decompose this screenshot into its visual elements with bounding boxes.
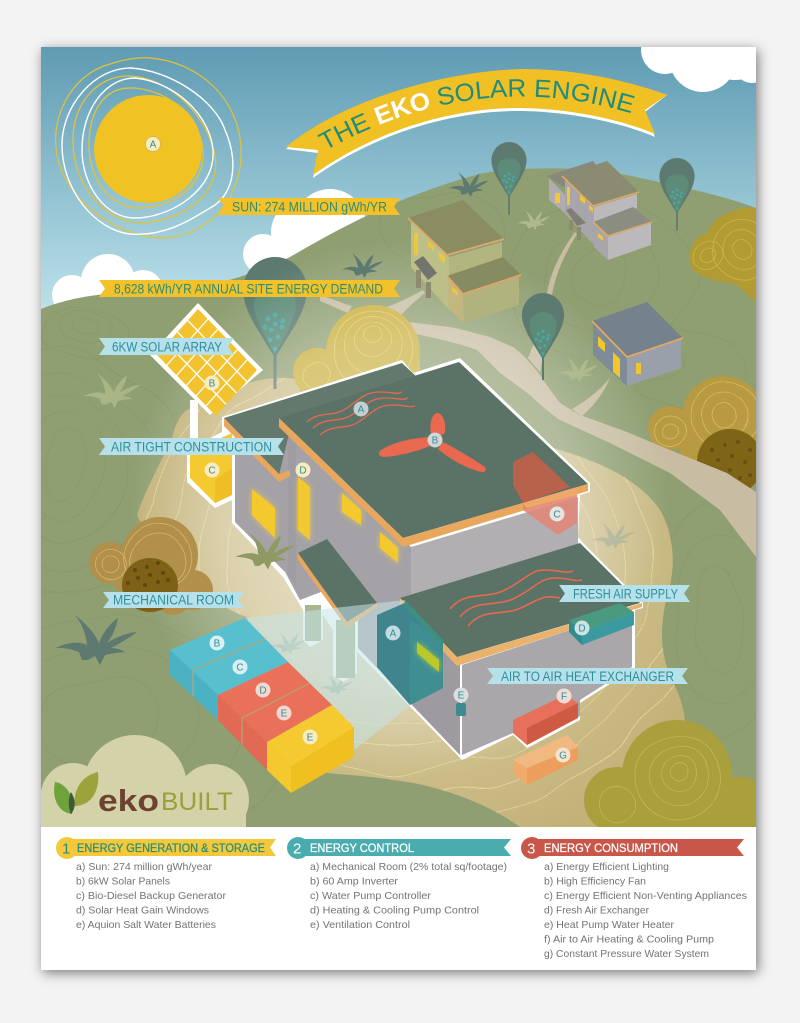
marker badges [146,136,590,762]
list 3: e) Heat Pump Water Heater [544,919,674,931]
banner: fresh air supply: FRESH AIR SUPPLY [573,586,678,602]
badge: block E yellow [302,730,318,744]
banner: mechanical room: MECHANICAL ROOM [113,592,234,608]
illustrated scene [41,47,756,827]
contour lines on hills [41,192,756,811]
legend: energy generation and storage [56,837,276,931]
hills [41,168,756,827]
badge: generator C [204,462,220,478]
list 2 [310,861,507,931]
heat waves lower roof [450,570,582,626]
tree: large by solar array [243,257,307,389]
list 1: a) Sun: 274 million gWh/year [76,861,212,873]
list 3: d) Fresh Air Exchanger [544,904,649,916]
bush: left with dark core [89,517,213,615]
grass: pale by tree [557,357,598,382]
title banner [286,69,667,178]
badge: fresh air D: D [578,624,586,634]
grass: in front of house [235,533,295,570]
badge: block B: B [214,638,221,650]
main roof [279,362,588,547]
house: blue-grey [592,302,683,386]
house silhouette outline [187,358,643,760]
house: grey multi-wing [547,161,652,260]
red storage blocks [218,662,332,770]
header 3: 3 [527,840,535,858]
bush core [122,558,178,612]
badge: pump F: F [561,692,567,702]
list 3: g) Constant Pressure Water System [544,948,709,960]
header 2: 2 [293,840,301,858]
badge: lighting A: A [358,404,365,416]
lower roof [400,543,642,666]
translucent mechanical room wedge [245,600,410,750]
grass: behind banner [342,253,383,278]
cloud: left [52,254,160,304]
list 1: d) Solar Heat Gain Windows [76,904,209,916]
cloud: middle [243,189,365,269]
header 3: ENERGY CONSUMPTION [544,841,678,855]
badge: block B [210,636,224,650]
logo built: BUILT [161,788,233,816]
legend: energy consumption [521,837,747,960]
badge: fan B [428,432,442,448]
porch columns [305,605,355,678]
badge: lighting A [354,402,368,416]
generator box [190,433,232,503]
grass: left pale [83,373,140,408]
badge: sun A: A [150,140,157,150]
list 3: f) Air to Air Heating & Cooling Pump [544,934,714,946]
grass: large dark [55,615,137,665]
house: pale green two-storey [408,200,521,323]
title text: THE EKO SOLAR ENGINE [317,79,635,148]
tan ground around the house [137,378,690,827]
badge: pump F [556,688,572,704]
yellow storage block [267,705,354,793]
list 2: d) Heating & Cooling Pump Control [310,904,479,916]
list 1: e) Aquion Salt Water Batteries [76,919,216,931]
list 1 [76,861,227,931]
badge: water heater E [454,688,468,702]
legend: energy control [287,837,511,931]
banner: air tight construction: AIR TIGHT CONSTRUCTION [111,440,272,454]
grass: under the wedge left [272,632,304,654]
badge: water heater E: E [458,690,465,702]
grass: pale far hill [517,210,550,230]
contour lines on tan ground [146,378,674,812]
water heater [456,703,466,716]
badge: mechanical A [386,626,400,640]
list 2: c) Water Pump Controller [310,890,432,902]
badge: sun A [146,136,160,152]
house glow [150,258,650,757]
badge: block C [232,660,248,674]
grass: under the wedge right [321,676,352,694]
badge: solar B [204,376,220,390]
grass: right of house [592,523,635,549]
badge: block C: C [236,662,244,674]
heat waves upper roof [307,392,415,435]
header 2: ENERGY CONTROL [310,841,414,855]
sun disc [94,95,202,203]
banner: sun: SUN: 274 MILLION gWh/YR [232,200,387,214]
house walls [235,428,632,755]
list 3: c) Energy Efficient Non-Venting Appliances [544,890,747,902]
appliance box [513,452,577,535]
badge: solar B: B [209,378,216,390]
list 3: a) Energy Efficient Lighting [544,861,669,873]
banner: solar array: 6KW SOLAR ARRAY [112,340,222,354]
badge: windows D: D [299,466,307,476]
header 3 [521,837,744,859]
air to air pump box [513,695,578,745]
tree: by road [522,293,564,380]
header 1 [56,837,276,859]
list 3: b) High Efficiency Fan [544,876,646,888]
header 1: 1 [62,840,70,858]
badge: windows D [296,462,310,478]
fan [379,413,486,472]
blue storage blocks [170,618,288,720]
badge: block E red [276,706,292,720]
solar array [150,303,263,445]
cloud: top right [641,47,756,92]
bush: yellow behind the house [293,305,420,400]
badge: appliances C [550,506,564,522]
badge: mechanical A: A [390,628,397,640]
road [320,232,756,557]
list 1: b) 6kW Solar Panels [76,876,170,888]
banner: air to air heat exchanger: AIR TO AIR HEAT EXCHANGER [501,669,674,684]
badge: block D [256,682,270,698]
badge: block E red: E [281,708,288,720]
badge: block E yellow: E [307,732,314,744]
water system box [513,735,578,785]
list 3 [544,861,747,960]
bush: right with dark core [648,376,756,488]
bush core [697,429,756,488]
bush: top right [690,208,756,302]
badge: water system G [556,748,570,762]
bush: bottom right [584,720,770,837]
tree: far right [659,158,695,231]
badge: fan B: B [432,436,439,446]
tree: far left [491,142,527,215]
logo cloud [41,735,249,839]
logo wordmark: eko [98,783,159,818]
fresh air exchanger box [569,603,634,645]
list 2: e) Ventilation Control [310,919,410,931]
badge: water system G: G [559,750,567,762]
badge: block D: D [259,686,267,696]
header 1: ENERGY GENERATION & STORAGE [77,841,265,855]
list 2: b) 60 Amp Inverter [310,876,399,888]
sun rings [56,58,241,238]
sky [41,47,756,309]
banner: site energy demand: 8,628 kWh/YR ANNUAL SITE ENERGY DEMAND [114,282,383,296]
header 2 [287,837,511,859]
badge: fresh air D [574,620,590,636]
logo: ekobuilt [54,772,233,818]
badge: generator C: C [208,466,216,476]
porch roof [298,539,377,628]
teal mechanical room [377,602,443,705]
glowing windows [252,477,398,563]
badge: appliances C: C [553,510,561,520]
grass: on far hill [448,172,489,197]
left wing roof [224,363,420,482]
list 2: a) Mechanical Room (2% total sq/footage) [310,861,507,873]
list 1: c) Bio-Diesel Backup Generator [76,890,227,902]
